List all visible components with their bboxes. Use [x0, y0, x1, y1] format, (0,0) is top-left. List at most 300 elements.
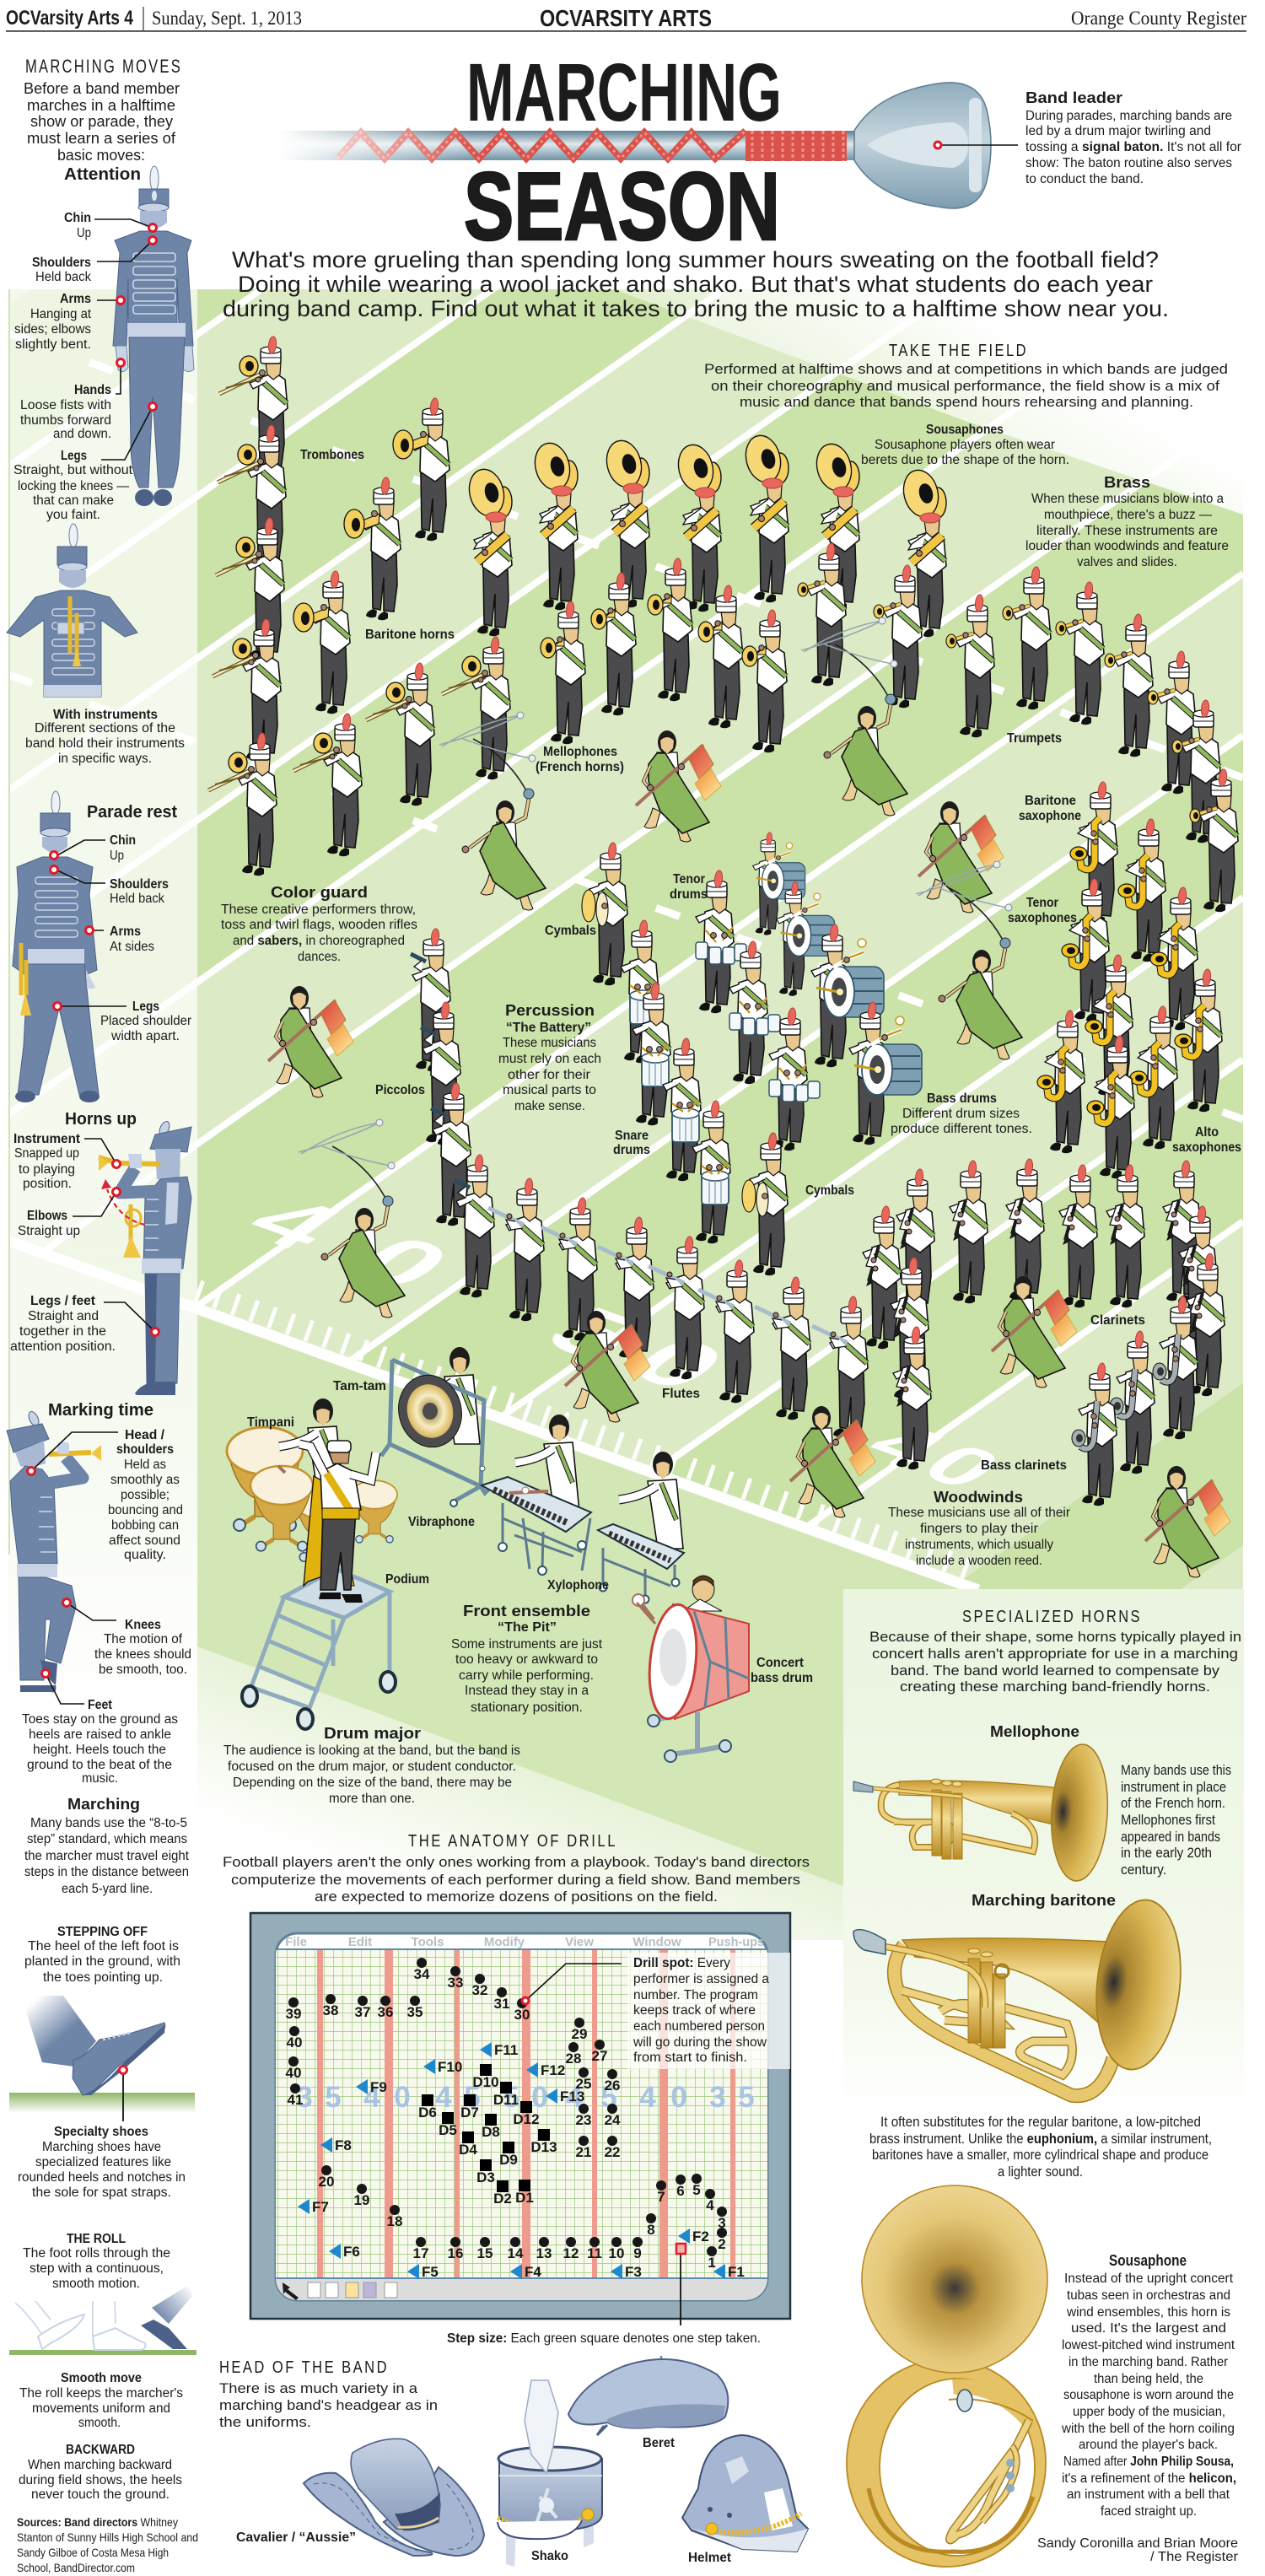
icon: marching baritone: Marching baritone	[972, 1892, 1116, 1909]
field labels: Flutes	[662, 1387, 700, 1401]
text: stepping off: the toes pointing up.	[43, 1970, 163, 1985]
drum squares: D8	[482, 2124, 500, 2140]
masthead: OCVarsity Arts 4	[6, 7, 134, 30]
text: mellophone: Many bands use this	[1121, 1763, 1231, 1778]
performer dots: 30	[514, 2007, 530, 2023]
text: front ensemble	[451, 1603, 603, 1715]
performer dots: 40	[286, 2065, 301, 2081]
credit: Sandy Coronilla and Brian Moore	[1037, 2536, 1238, 2551]
text: smooth move: smooth.	[78, 2416, 121, 2430]
title: SEASON	[464, 154, 780, 261]
section: specialized horns text: Because of their shape, some horns typically played in	[869, 1629, 1241, 1645]
figure: horns up	[73, 1120, 191, 1395]
text: percussion: “The Battery”	[506, 1021, 591, 1035]
text: percussion: musical parts to	[503, 1083, 596, 1097]
labels: attention stance: that can make	[33, 493, 114, 508]
performer dots: 23	[576, 2112, 591, 2128]
drum squares: D7	[460, 2104, 479, 2121]
field labels: saxophones	[1172, 1140, 1241, 1155]
callout: band leader: Band leader	[1025, 89, 1122, 106]
performer dots: 33	[448, 1975, 463, 1991]
text: brass: When these musicians blow into a	[1031, 492, 1224, 506]
figure: parade rest	[13, 791, 177, 1102]
icon: mellophone: Mellophone	[990, 1723, 1079, 1740]
text: baritone: It often substitutes for the regular baritone, a low-pitched	[880, 2115, 1201, 2130]
text: sousaphone: sousaphone is worn around the	[1063, 2388, 1234, 2402]
text: bass drums: Different drum sizes	[902, 1107, 1020, 1121]
text: specialty shoes	[18, 2125, 186, 2200]
labels: parade rest: Up	[110, 849, 124, 863]
performer dots: 12	[563, 2245, 579, 2261]
text: bass drums	[891, 1091, 1032, 1136]
intro text: What's more grueling than spending long summer hours sweating on the football field?	[232, 247, 1159, 272]
performer dots: 22	[605, 2144, 620, 2160]
text: marching: Many bands use the “8-to-5	[30, 1816, 187, 1830]
labels: horns up: to playing	[19, 1162, 75, 1177]
text: backward: BACKWARD	[66, 2443, 135, 2457]
heading: marching moves intro: marches in a halftime	[27, 97, 175, 114]
labels: attention stance: locking the knees —	[18, 479, 129, 493]
credit: / The Register	[1150, 2550, 1239, 2564]
yard numbers: 0	[394, 2081, 411, 2114]
performer dots: 8	[647, 2222, 655, 2238]
labels: horns up: together in the	[19, 1324, 106, 1339]
performer dots: 4	[706, 2197, 714, 2213]
labels: marking time: quality.	[124, 1548, 166, 1562]
field labels: Podium	[385, 1572, 429, 1587]
labels: horns up: Elbows	[27, 1209, 67, 1223]
callout: band leader: tossing a signal baton. It's not all for	[1025, 140, 1241, 154]
labels: parade rest: Placed shoulder	[100, 1014, 191, 1028]
section: specialized horns text	[869, 1608, 1241, 1695]
menu bar: Push-ups	[708, 1935, 764, 1949]
menu bar: File	[285, 1935, 307, 1949]
labels: attention stance: Hands	[74, 383, 111, 397]
performer dots: 6	[676, 2183, 685, 2199]
performer dots: 16	[448, 2245, 463, 2261]
text: woodwinds: Woodwinds	[934, 1489, 1023, 1506]
text: bass drums: Bass drums	[927, 1091, 997, 1106]
heading: anatomy of drill: are expected to memorize dozens of positions on the field.	[315, 1889, 718, 1905]
heading: anatomy of drill: THE ANATOMY OF DRILL	[408, 1832, 617, 1851]
section: head of the band text	[219, 2358, 438, 2430]
callout: drill spot: keeps track of where	[633, 2003, 756, 2018]
section: specialized horns text: concert halls aren't appropriate for use in a marching	[872, 1646, 1238, 1662]
flag triangles: F13	[560, 2088, 584, 2104]
yard numbers: 3	[296, 2081, 313, 2114]
section: take the field text: TAKE THE FIELD	[889, 342, 1028, 360]
performer dots: 2	[718, 2236, 726, 2252]
field labels: Alto	[1195, 1125, 1219, 1140]
field labels: Trombones	[300, 448, 364, 462]
callout: band leader: led by a drum major twirling and	[1025, 124, 1211, 138]
text: specialty shoes: specialized features like	[35, 2155, 171, 2169]
performer dots: 1	[708, 2255, 716, 2271]
text: specialty shoes: Specialty shoes	[54, 2125, 148, 2139]
icon: sousaphone	[847, 2185, 1047, 2567]
labels: horns up	[10, 1110, 137, 1354]
text: color guard: and sabers, in choreographed	[233, 934, 405, 948]
text: stepping off: The heel of the left foot is	[28, 1939, 179, 1954]
performer dots: 35	[407, 2004, 423, 2020]
performer dots: 27	[592, 2048, 607, 2064]
labels: attention stance: sides; elbows	[14, 322, 91, 337]
front ensemble: drum major	[299, 1441, 376, 1603]
heading: marching moves intro: Before a band member	[24, 80, 180, 97]
field labels: Piccolos	[375, 1083, 425, 1097]
text: sousaphone: with the bell of the horn coiling	[1061, 2422, 1235, 2436]
icon: marching baritone	[853, 1892, 1188, 2096]
labels: marking time: affect sound	[109, 1533, 180, 1548]
flag triangles: F9	[370, 2079, 387, 2095]
icon: shako: Shako	[531, 2549, 568, 2563]
field labels: saxophones	[1008, 911, 1077, 925]
performer dots: 11	[587, 2245, 602, 2261]
labels: horns up: Horns up	[65, 1110, 137, 1129]
text: color guard: Color guard	[271, 884, 368, 901]
text: mellophone: appeared in bands	[1121, 1830, 1220, 1845]
performer dots: 40	[287, 2034, 302, 2051]
flag triangles	[298, 2042, 745, 2280]
performer dots: 17	[413, 2245, 428, 2261]
section: piccolos	[411, 929, 494, 1297]
icon: rolling shoes	[9, 2286, 196, 2355]
yard numbers: 4	[363, 2081, 380, 2114]
yard numbers: 4	[566, 2081, 583, 2114]
text: backward: during field shows, the heels	[19, 2473, 182, 2487]
flag triangles: F12	[541, 2062, 565, 2078]
heading: marching moves intro: MARCHING MOVES	[25, 56, 182, 77]
section: trombones	[208, 337, 510, 876]
labels: marking time: Marking time	[48, 1401, 153, 1420]
labels: parade rest	[100, 833, 191, 1043]
section: head of the band text: the uniforms.	[219, 2414, 311, 2430]
field labels: Tam-tam	[333, 1379, 386, 1393]
intro text: during band camp. Find out what it takes to bring the music to a halftime show near you.	[223, 296, 1169, 321]
text: sousaphone: around the player's back.	[1079, 2438, 1218, 2452]
labels: parade rest: At sides	[110, 940, 154, 954]
text: drum major	[223, 1725, 520, 1806]
text: front ensemble: carry while performing.	[459, 1668, 594, 1683]
text: with instruments: band hold their instruments	[25, 736, 185, 751]
text: sousaphones: Sousaphone players often wear	[875, 438, 1055, 452]
text: baritone: baritones have a smaller, more cylindrical shape and produce	[872, 2148, 1208, 2163]
yard numbers: 5	[503, 2081, 519, 2114]
text: mellophone: century.	[1121, 1862, 1166, 1878]
callout: step size	[447, 2244, 761, 2346]
text: drum major: Depending on the size of the band, there may be	[233, 1776, 512, 1790]
text: mellophone: Mellophones first	[1121, 1813, 1215, 1828]
intro text: Doing it while wearing a wool jacket and shako. But that's what students do each year	[238, 272, 1153, 297]
chart: drill screen	[250, 1913, 790, 2346]
text: sousaphone: it's a refinement of the helicon,	[1062, 2471, 1236, 2486]
field labels: Concert	[756, 1656, 804, 1670]
section: head of the band text: There is as much variety in a	[219, 2380, 418, 2396]
flag triangles: F1	[728, 2264, 745, 2280]
section: head of the band text: marching band's headgear as in	[219, 2397, 438, 2413]
performer dots: 29	[572, 2026, 587, 2042]
text: brass	[1025, 474, 1229, 569]
text: brass: Brass	[1104, 474, 1150, 491]
text: woodwinds: instruments, which usually	[905, 1538, 1053, 1552]
text: percussion: other for their	[508, 1068, 590, 1082]
callout: step size: Step size: Each green square denotes one step taken.	[447, 2331, 761, 2346]
text: smooth move: Smooth move	[61, 2371, 142, 2385]
field labels: Trumpets	[1007, 731, 1062, 746]
text: sousaphone: upper body of the musician,	[1073, 2405, 1225, 2419]
drum squares: D5	[439, 2122, 457, 2138]
menu bar: Tools	[412, 1935, 444, 1949]
labels: attention stance: Legs	[61, 449, 87, 463]
labels: marking time: ground to the beat of the	[27, 1758, 172, 1772]
labels: marking time: Head /	[125, 1428, 165, 1442]
menu bar: Edit	[348, 1935, 372, 1949]
heading: marching moves intro	[24, 56, 182, 184]
callout: band leader: to conduct the band.	[1025, 172, 1144, 186]
text: the roll: step with a continuous,	[30, 2261, 164, 2276]
text: drum major: focused on the drum major, or student conductor.	[228, 1760, 516, 1774]
field labels: Baritone	[1025, 794, 1076, 808]
performer dots: 38	[323, 2002, 338, 2018]
performer dots: 15	[477, 2245, 493, 2261]
text: stepping off	[24, 1925, 180, 1985]
labels: attention stance: Loose fists with	[20, 398, 111, 412]
field labels: drums	[613, 1143, 650, 1157]
text: color guard: dances.	[298, 950, 341, 964]
field labels: Bass clarinets	[981, 1458, 1067, 1473]
performer dots: 41	[288, 2092, 303, 2108]
masthead: Sunday, Sept. 1, 2013	[152, 8, 302, 29]
labels: marking time	[22, 1401, 191, 1786]
menu bar: View	[565, 1935, 594, 1949]
yard numbers: 4	[639, 2081, 656, 2114]
text: sousaphone: Named after John Philip Sousa,	[1063, 2455, 1234, 2469]
text: specialty shoes: the sole for spat straps.	[32, 2185, 171, 2200]
labels: marking time: Knees	[125, 1618, 161, 1632]
labels: marking time: music.	[82, 1771, 118, 1786]
field labels: (French horns)	[536, 760, 624, 774]
labels: marking time: height. Heels touch the	[33, 1743, 166, 1757]
menu bar: Window	[632, 1935, 681, 1949]
text: with instruments: With instruments	[53, 708, 158, 722]
drum squares: D9	[499, 2152, 518, 2168]
field labels: bass drum	[751, 1671, 813, 1685]
section: saxophones	[1037, 782, 1222, 1178]
sources: School, BandDirector.com	[17, 2561, 135, 2574]
drum squares: D1	[515, 2190, 534, 2206]
icon: helmet: Helmet	[688, 2551, 732, 2565]
performer dots: 13	[536, 2245, 552, 2261]
labels: attention stance: Chin	[64, 211, 91, 225]
text: color guard	[221, 884, 417, 964]
text: baritone: brass instrument. Unlike the euphonium, a similar instrument,	[869, 2131, 1212, 2147]
text: drum major: The audience is looking at the band, but the band is	[223, 1743, 520, 1758]
field labels: Tenor	[1026, 896, 1058, 910]
section: sousaphones	[465, 432, 946, 637]
text: with instruments: in specific ways.	[58, 752, 152, 766]
credit	[1037, 2536, 1239, 2564]
drum squares: D4	[459, 2142, 477, 2158]
masthead: Orange County Register	[1071, 8, 1246, 29]
performer dots: 19	[354, 2192, 369, 2208]
drum squares: D3	[476, 2169, 495, 2185]
text: the roll: THE ROLL	[67, 2232, 126, 2246]
text: the roll: smooth motion.	[52, 2277, 140, 2291]
yard numbers	[296, 2081, 755, 2114]
labels: horns up: Straight and	[28, 1309, 99, 1323]
panel: specialized horns background	[843, 1589, 1244, 2112]
performer dots: 20	[319, 2174, 334, 2190]
text: brass: louder than woodwinds and feature	[1025, 539, 1229, 553]
heading: marching moves intro: Attention	[64, 165, 141, 184]
text: sousaphone: an instrument with a bell that	[1067, 2487, 1230, 2502]
yard numbers: 0	[670, 2081, 687, 2114]
text: color guard: toss and twirl flags, wooden rifles	[221, 918, 417, 932]
text: percussion: These musicians	[503, 1036, 596, 1050]
performer dots: 32	[472, 1982, 487, 1998]
text: marching: the marcher must travel eight	[24, 1849, 190, 1863]
section: take the field text: on their choreography and musical performance, the field show is a mix of	[711, 378, 1219, 394]
labels: marking time: heels are raised to ankle	[29, 1727, 171, 1742]
text: sousaphone: wind ensembles, this horn is	[1066, 2305, 1230, 2320]
callout: drill spot: number. The program	[633, 1988, 758, 2002]
text: bass drums: produce different tones.	[891, 1122, 1032, 1136]
icon: cavalier hat	[236, 2439, 484, 2556]
yard number: 40 left: 40	[223, 1183, 525, 1321]
performer dots: 26	[605, 2078, 620, 2094]
flag triangles: F3	[625, 2264, 642, 2280]
heading: anatomy of drill	[223, 1832, 810, 1905]
text: marching: Marching	[67, 1796, 140, 1813]
front ensemble: tam-tam	[381, 1347, 498, 1506]
labels: parade rest: Shoulders	[110, 877, 169, 892]
icon: cavalier hat: Cavalier / “Aussie”	[236, 2530, 356, 2545]
section: mellophones	[541, 558, 787, 752]
field labels: Vibraphone	[408, 1515, 475, 1529]
flag triangles: F4	[525, 2264, 541, 2280]
labels: marking time: bouncing and	[108, 1503, 183, 1517]
text: sousaphone: faced straight up.	[1101, 2504, 1197, 2519]
text: drum major: more than one.	[329, 1792, 415, 1806]
heading: marching moves intro: show or parade, they	[30, 113, 173, 130]
section: color guard	[268, 617, 1230, 1577]
flag triangles: F2	[692, 2228, 709, 2245]
text: with instruments	[25, 708, 185, 766]
text: stepping off: STEPPING OFF	[57, 1925, 148, 1939]
flag triangles: F8	[335, 2137, 352, 2153]
sources: Stanton of Sunny Hills High School and	[17, 2530, 198, 2544]
title: MARCHING	[466, 46, 782, 138]
callout: drill spot	[522, 1953, 790, 2069]
drum squares: D2	[493, 2191, 512, 2207]
labels: parade rest: width apart.	[110, 1029, 180, 1043]
text: front ensemble: stationary position.	[471, 1700, 583, 1715]
section: take the field text: music and dance that bands spend hours rehearsing and planning.	[740, 394, 1193, 410]
labels: attention stance: thumbs forward	[20, 413, 111, 428]
text: woodwinds: include a wooden reed.	[916, 1554, 1042, 1568]
text: smooth move: The roll keeps the marcher's	[19, 2386, 183, 2401]
text: brass: literally. These instruments are	[1036, 524, 1218, 538]
drum squares: D6	[418, 2104, 437, 2121]
masthead: OCVARSITY ARTS	[540, 5, 712, 31]
text: backward: never touch the ground.	[31, 2487, 170, 2502]
performer dots: 7	[657, 2189, 665, 2205]
callout: drill spot: each numbered person	[633, 2019, 765, 2034]
text: backward: When marching backward	[28, 2458, 172, 2472]
section: take the field text: Performed at halftime shows and at competitions in which bands are judged	[704, 361, 1228, 377]
text: sousaphone: in the marching band. Rather	[1069, 2355, 1229, 2369]
text: drum major: Drum major	[324, 1725, 421, 1742]
text: smooth move	[19, 2371, 183, 2430]
labels: attention stance: Hanging at	[30, 307, 92, 321]
figure: parade rest: Parade rest	[87, 803, 177, 822]
sources	[17, 2515, 198, 2574]
yard number: 50: 50	[524, 1294, 774, 1413]
drum squares: D10	[472, 2074, 499, 2090]
section: clarinets	[863, 1159, 1225, 1469]
icon: shako	[498, 2380, 602, 2567]
labels: marking time: be smooth, too.	[99, 1663, 187, 1677]
text: sousaphone	[1061, 2252, 1236, 2519]
labels: horns up: Snapped up	[14, 1146, 79, 1161]
labels: attention stance: Held back	[35, 270, 91, 284]
labels: horns up: position.	[23, 1177, 72, 1191]
text: sousaphone: Instead of the upright concert	[1064, 2272, 1234, 2286]
figure: with instruments	[7, 524, 137, 697]
toolbar	[283, 2282, 397, 2300]
field labels: Clarinets	[1090, 1313, 1145, 1328]
performer dots: 39	[286, 2006, 301, 2022]
text: specialty shoes: rounded heels and notches in	[18, 2170, 186, 2185]
yard numbers: 5	[464, 2081, 481, 2114]
text: mellophone: instrument in place	[1121, 1780, 1226, 1795]
text: backward	[19, 2443, 182, 2502]
section: baritone horns	[293, 398, 449, 714]
text: marching: steps in the distance between	[24, 1865, 189, 1879]
text: mellophone: in the early 20th	[1121, 1846, 1212, 1861]
performer dots: 28	[566, 2051, 581, 2067]
callout: drill spot: will go during the show	[632, 2035, 767, 2050]
callout: band leader: During parades, marching bands are	[1025, 109, 1232, 123]
text: percussion	[498, 1002, 601, 1113]
front ensemble: podium	[242, 1569, 396, 1729]
text: woodwinds	[888, 1489, 1070, 1568]
icon: drum major baton	[278, 83, 1018, 208]
text: woodwinds: fingers to play their	[920, 1522, 1038, 1536]
text: sousaphones: berets due to the shape of the horn.	[861, 453, 1069, 467]
field labels: Cymbals	[545, 924, 596, 938]
labels: attention stance: Up	[77, 226, 91, 240]
performer dots: 3	[718, 2215, 726, 2231]
labels: marking time: Toes stay on the ground as	[22, 1712, 178, 1727]
text: sousaphone: than being held, the	[1094, 2372, 1203, 2386]
labels: marking time: Held as	[124, 1458, 166, 1472]
section: trumpets	[798, 543, 1238, 912]
yard number: 40 right: 40	[847, 1412, 1028, 1502]
heading: marching moves intro: basic moves:	[57, 147, 145, 164]
section: specialized horns text: creating these marching band-friendly horns.	[900, 1679, 1210, 1695]
text: stepping off: planted in the ground, with	[24, 1954, 180, 1969]
drum squares: D11	[493, 2092, 519, 2108]
performer dots: 25	[576, 2076, 591, 2092]
callout: drill spot: from start to finish.	[633, 2051, 747, 2065]
heading: marching moves intro: must learn a series of	[27, 130, 176, 147]
labels: marking time: shoulders	[116, 1442, 174, 1457]
yard numbers: 5	[325, 2081, 342, 2114]
text: with instruments: Different sections of the	[35, 721, 175, 736]
text: sousaphone: used. It's the largest and	[1071, 2321, 1226, 2336]
drum squares	[418, 2064, 557, 2207]
